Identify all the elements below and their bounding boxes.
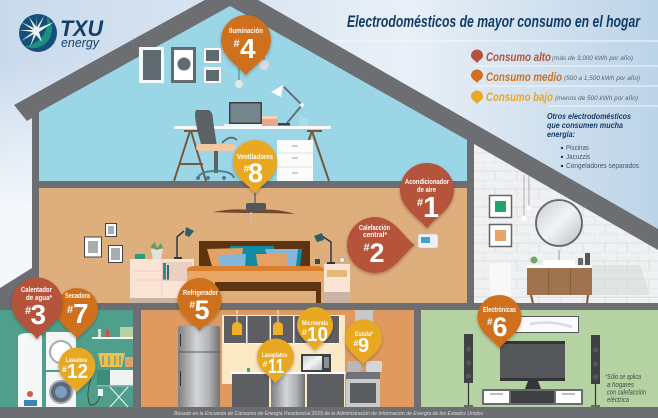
drawers	[277, 140, 313, 181]
pin #8 fans	[233, 140, 277, 193]
pin #5 refrigerator	[178, 278, 222, 331]
other appliances text: que consumen mucha	[547, 120, 623, 130]
vanity	[527, 250, 650, 303]
pin #11 dishwasher: Lavaplatos	[262, 352, 287, 359]
kitchen backsplash	[222, 315, 345, 407]
nightstand with lamp	[314, 233, 350, 303]
pin #7 dryer: #	[67, 304, 73, 316]
bed	[187, 241, 324, 303]
pin #2 central heating: #	[364, 242, 370, 254]
logo: TXU energy	[19, 14, 104, 52]
wall art over TV	[516, 316, 578, 332]
pin #2 central heating	[347, 217, 415, 273]
pin #11 dishwasher: #	[262, 359, 268, 369]
pin #11 dishwasher: 11	[268, 356, 284, 378]
desk	[174, 126, 331, 181]
pin #5 refrigerator: Refrigerador	[183, 288, 218, 297]
logo: TXU energy: TXU	[60, 16, 104, 41]
pin #9 stove: 9	[358, 335, 369, 357]
pin #7 dryer	[56, 288, 98, 339]
room: attic office	[39, 6, 467, 181]
legend: medium consumption: (500 a 1,500 kWh por año)	[564, 75, 640, 82]
laundry table and outlet	[88, 370, 133, 407]
pin #12 washer: Lavadora	[66, 357, 87, 364]
other appliances text: Congeladores separados	[566, 161, 639, 170]
legend	[330, 41, 658, 106]
pin #3 water heater: Calentador	[21, 285, 52, 294]
refrigerator	[178, 326, 220, 407]
pin #9 stove	[345, 320, 382, 364]
pin #9 stove: Estufa*	[355, 331, 373, 338]
TV console	[482, 389, 583, 405]
laundry shelf	[92, 327, 133, 339]
range hood	[355, 310, 373, 328]
pin #8 fans: 8	[248, 158, 263, 188]
pin #10 microwave	[297, 307, 333, 351]
pin #1 air conditioner: #	[417, 197, 423, 209]
other appliances text: Jacuzzis	[566, 152, 590, 161]
legend: high consumption: Consumo alto	[486, 50, 551, 64]
dresser with plant and lamp	[130, 227, 194, 303]
bathroom frames	[490, 196, 512, 246]
pin #4 lighting: 4	[240, 33, 256, 64]
pin #4 lighting	[221, 15, 271, 76]
upper cabinets	[223, 315, 340, 344]
attic wall art	[139, 47, 221, 83]
footnote: eléctrica	[607, 397, 629, 404]
pin #6 electronics: Electrónicas	[483, 305, 516, 314]
washer and dryer	[46, 332, 76, 407]
pin #7 dryer: Secadora	[65, 291, 91, 300]
thermostat	[418, 234, 438, 248]
pin #1 air conditioner: de aire	[417, 187, 436, 194]
pin #12 washer: #	[62, 364, 67, 374]
other appliances text: Otros electrodomésticos	[547, 111, 631, 121]
attic pendant lights	[235, 56, 269, 88]
pin #3 water heater: de agua*	[26, 293, 52, 302]
legend: high consumption: (más de 3,000 kWh por año)	[552, 55, 633, 62]
pin #2 central heating: Calefacción	[359, 225, 390, 232]
pin #1 air conditioner	[400, 163, 454, 228]
bathroom pendant lights	[522, 175, 532, 220]
pin #3 water heater: #	[25, 305, 31, 317]
legend: medium consumption: Consumo medio	[486, 70, 562, 84]
microwave	[301, 354, 331, 372]
desk lamp and books	[262, 85, 308, 126]
legend: low consumption	[471, 90, 638, 104]
footnote	[605, 374, 646, 404]
room: laundry	[0, 310, 133, 407]
television	[500, 341, 565, 389]
mirror	[536, 200, 582, 246]
legend: low consumption: (menos de 500 kWh por año)	[555, 95, 638, 102]
footnote: *Sólo se aplica	[605, 374, 641, 381]
kitchen pendants	[232, 310, 283, 335]
other appliances text	[547, 111, 639, 170]
room: bathroom wall	[474, 144, 658, 303]
pin #2 central heating: 2	[370, 238, 385, 268]
speakers	[464, 334, 600, 406]
pin #10 microwave: 10	[307, 324, 328, 346]
pin #5 refrigerator: 5	[194, 295, 210, 325]
pin #8 fans: #	[244, 163, 250, 175]
pin #4 lighting: #	[234, 38, 240, 50]
pin #2 central heating: central*	[363, 232, 387, 239]
footnote: con calefacción	[607, 390, 646, 396]
room: kitchen	[141, 310, 414, 407]
legend: medium consumption	[471, 70, 640, 84]
legend: low consumption: Consumo bajo	[486, 90, 553, 104]
bedroom wall frames	[84, 224, 122, 262]
pin #11 dishwasher	[257, 338, 294, 383]
pin #8 fans: Ventiladores	[237, 154, 273, 161]
pin #6 electronics	[478, 295, 522, 348]
pin #12 washer	[58, 348, 96, 392]
lower cabinets and dishwasher	[231, 368, 346, 407]
toilet	[490, 263, 511, 303]
room: bedroom	[39, 188, 467, 303]
pin #5 refrigerator: #	[190, 300, 196, 311]
ceiling fan	[213, 188, 295, 224]
pin #4 lighting: Iluminación	[229, 26, 263, 35]
pin #10 microwave: #	[302, 327, 307, 337]
logo: TXU energy: energy	[61, 35, 100, 50]
pin #7 dryer: 7	[73, 298, 89, 329]
source note: Basado en la Encuesta de Consumo de Energía Residencial 2015 de la Administración de Información de Energía de los Estados Unidos	[174, 411, 483, 417]
stove	[346, 361, 382, 407]
laundry basket	[98, 353, 133, 367]
pin #6 electronics: 6	[492, 312, 508, 342]
pin #9 stove: #	[354, 338, 358, 348]
pin #1 air conditioner: 1	[423, 192, 439, 224]
laptop	[224, 102, 268, 126]
other appliances text: energía:	[547, 129, 575, 139]
office chair	[195, 110, 237, 180]
legend: high consumption	[471, 50, 633, 64]
pin #12 washer: 12	[67, 361, 88, 383]
pin #6 electronics: #	[487, 317, 493, 328]
water heater	[18, 333, 42, 407]
other appliances text: Piscinas	[566, 143, 589, 152]
pin #3 water heater: 3	[30, 299, 46, 330]
footnote: a hogares	[607, 382, 634, 389]
pin #1 air conditioner: Acondicionador	[405, 179, 449, 186]
room: living room	[421, 310, 658, 407]
pin #3 water heater	[12, 278, 62, 339]
pin #10 microwave: Microonda	[302, 320, 328, 327]
